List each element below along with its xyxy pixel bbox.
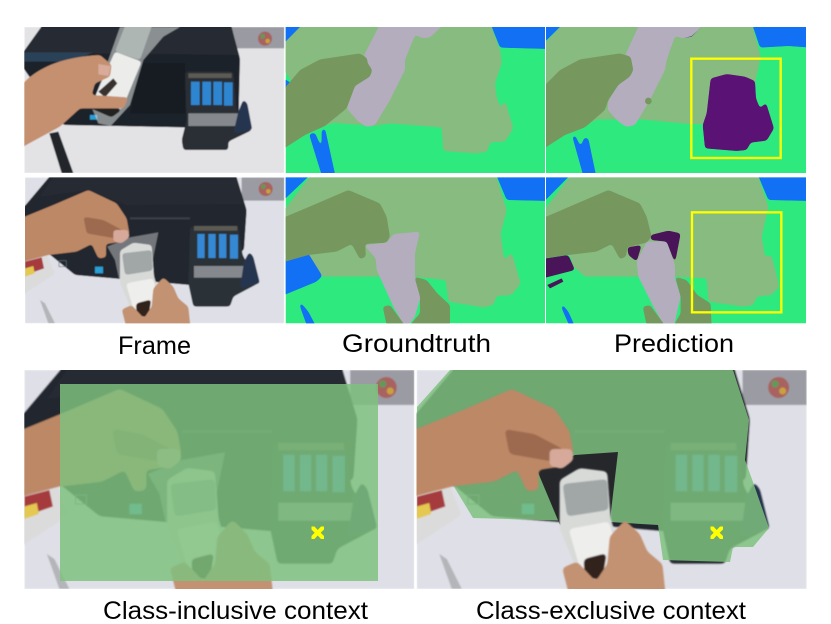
panel: frame row 2 photo bbox=[20, 172, 284, 329]
column label: Groundtruth: Groundtruth bbox=[342, 330, 491, 358]
panel: prediction row 1 segmentation bbox=[542, 22, 811, 178]
column label: Frame: Frame bbox=[118, 332, 191, 360]
yellow highlight box bbox=[691, 59, 781, 158]
panel: class-exclusive context photo bbox=[409, 362, 807, 597]
yellow cross marker bbox=[710, 526, 723, 539]
panel: class-inclusive context photo bbox=[17, 362, 414, 597]
column label: Prediction: Prediction bbox=[614, 330, 734, 358]
dark bag behind the bottle bbox=[537, 452, 618, 525]
panel: frame row 1 photo bbox=[20, 22, 284, 173]
panel: groundtruth row 1 segmentation bbox=[282, 22, 550, 178]
panel: groundtruth row 2 segmentation bbox=[282, 172, 550, 329]
yellow cross marker bbox=[312, 526, 324, 539]
green printer-shaped mask overlay bbox=[417, 370, 769, 562]
yellow highlight box bbox=[692, 212, 781, 312]
green rectangular context overlay bbox=[60, 384, 378, 581]
panel: prediction row 2 segmentation bbox=[542, 172, 811, 329]
